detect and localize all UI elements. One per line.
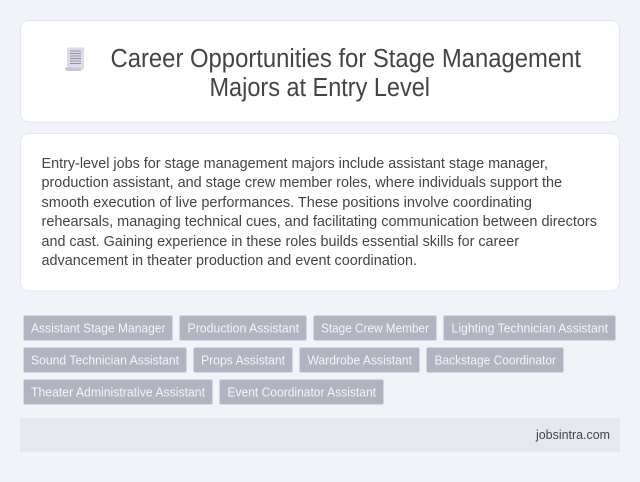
tag: Wardrobe Assistant [300,348,420,372]
tag: Stage Crew Member [314,316,436,340]
tag: Sound Technician Assistant: Sound Technician Assistant [31,354,180,368]
tag: Stage Crew Member: Stage Crew Member [321,322,429,336]
text block: description: smooth execution of live performances. These positions involve coordinating [42,195,532,211]
tag list [24,316,616,404]
tag: Event Coordinator Assistant [220,380,384,404]
tag: Production Assistant: Production Assistant [188,322,300,336]
tag: Props Assistant [194,348,292,372]
footer source text: jobsintra.com [535,428,610,442]
tag: Theater Administrative Assistant: Theater Administrative Assistant [31,386,206,400]
tag: Production Assistant [180,316,306,340]
tag: Backstage Coordinator: Backstage Coordinator [434,354,556,368]
tag: Backstage Coordinator [426,348,564,372]
panel: header [20,20,620,122]
tag: Event Coordinator Assistant: Event Coordinator Assistant [228,386,377,400]
icon: paper scroll [65,48,84,71]
footer [20,418,620,452]
tag: Lighting Technician Assistant: Lighting Technician Assistant [452,322,609,336]
tag: Props Assistant: Props Assistant [201,354,286,368]
tag: Assistant Stage Manager [24,316,172,340]
tag: Wardrobe Assistant: Wardrobe Assistant [308,354,413,368]
text block: description [42,156,597,269]
panel: description [20,134,620,291]
tag: Assistant Stage Manager: Assistant Stage Manager [31,322,166,336]
text block: description: production assistant, and stage crew member roles, where individuals support the [42,175,562,191]
text block: description: rehearsals, managing technical cues, and facilitating communication between directors [42,214,597,230]
title: Career Opportunities for Stage Management [110,45,581,73]
title: Majors at Entry Level [210,74,430,102]
tag: Theater Administrative Assistant [24,380,212,404]
tag: Sound Technician Assistant [24,348,186,372]
text block: description: and cast. Gaining experience in these roles builds essential skills for career [42,234,519,250]
text block: description: Entry-level jobs for stage management majors include assistant stage manager, [42,156,548,172]
tag: Lighting Technician Assistant [444,316,616,340]
text block: description: advancement in theater production and event coordination. [42,253,417,269]
title [110,45,581,102]
